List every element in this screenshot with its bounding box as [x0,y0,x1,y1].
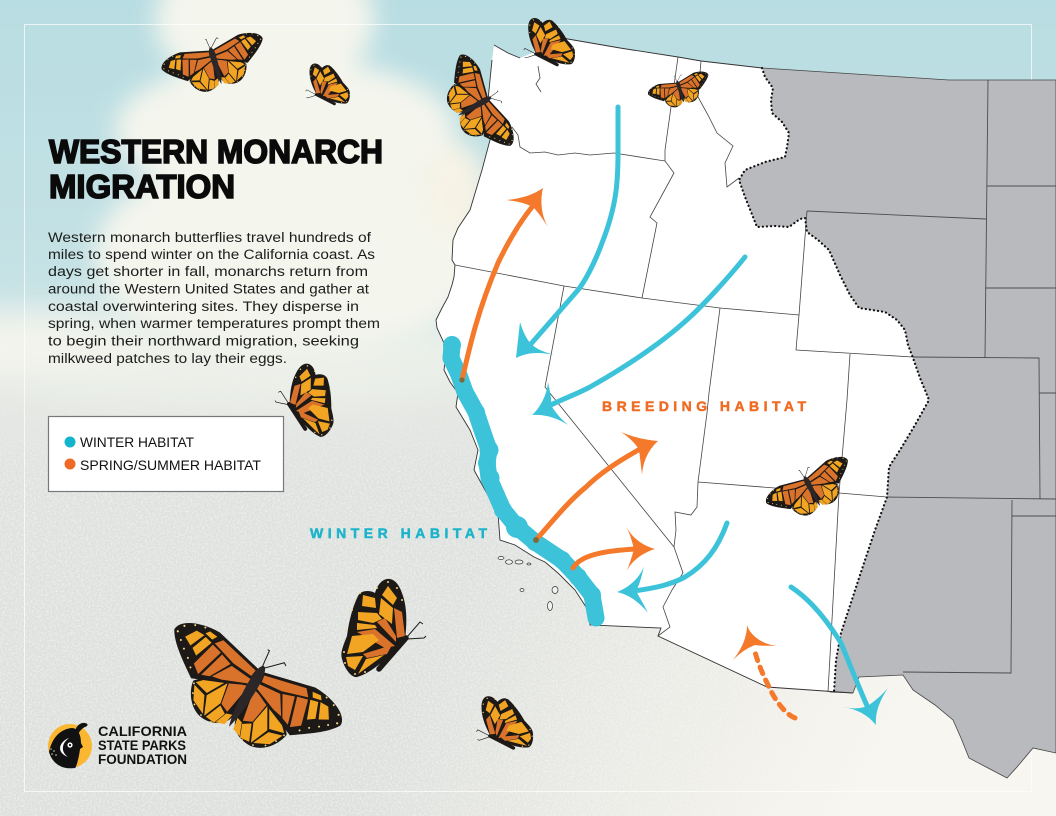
description text: milkweed patches to lay their eggs. [48,351,287,366]
icon: quail on yellow circle [48,723,92,768]
legend item: spring/summer habitat: SPRING/SUMMER HABITAT [80,457,261,473]
description text: days get shorter in fall, monarchs return from [48,264,368,279]
butterfly: large lower left [143,604,355,780]
description text: Western monarch butterflies travel hundreds of [48,230,371,245]
arrow: blue from Utah to California [617,523,727,613]
map: western states habitat area [436,35,929,693]
arrow: dashed orange from Mexico [733,625,795,718]
description text: around the Western United States and gather at [48,282,369,296]
butterfly: small top [296,55,353,116]
butterfly: Washington coast [430,48,524,162]
map: non-habitat states in grey [700,68,1056,778]
legend [48,416,284,492]
arrow: orange into Arizona border [573,526,655,573]
butterfly: small lower [464,685,538,764]
label: winter habitat: WINTER HABITAT [310,525,487,541]
logo wordmark: CALIFORNIA [98,723,187,739]
logo wordmark: FOUNDATION [98,751,187,767]
label: breeding habitat: BREEDING HABITAT [602,398,806,414]
arrow: orange into Nevada [533,432,658,543]
logo wordmark: STATE PARKS [98,737,186,753]
monarch range dotted boundary [739,68,929,692]
description text: spring, when warmer temperatures prompt them [48,316,380,331]
butterfly: Idaho [645,66,715,114]
logo: California State Parks Foundation [48,723,187,768]
butterfly: on legend [271,360,341,438]
butterfly: Washington north [512,8,579,79]
arrow: blue into Mexico [791,587,888,725]
title: WESTERN MONARCH [49,133,383,170]
title: MIGRATION [49,168,235,205]
logo wordmark [98,723,187,767]
description text [48,230,380,366]
butterfly: medium lower [341,579,426,677]
butterfly: top left [157,23,273,103]
legend item: winter habitat: WINTER HABITAT [80,434,194,450]
winter habitat coastal band [442,336,604,626]
channel islands [498,556,558,610]
arrow: orange north to Oregon [459,188,548,383]
description text: to begin their northward migration, seeking [48,334,359,348]
title [49,133,383,205]
arrow: blue from Idaho to Nevada [532,257,745,425]
description text: coastal overwintering sites. They disperse in [48,299,359,314]
butterfly: Colorado border [760,448,862,530]
description text: miles to spend winter on the California coast. As [48,247,375,262]
arrow: blue north to south from Washington [516,107,618,358]
